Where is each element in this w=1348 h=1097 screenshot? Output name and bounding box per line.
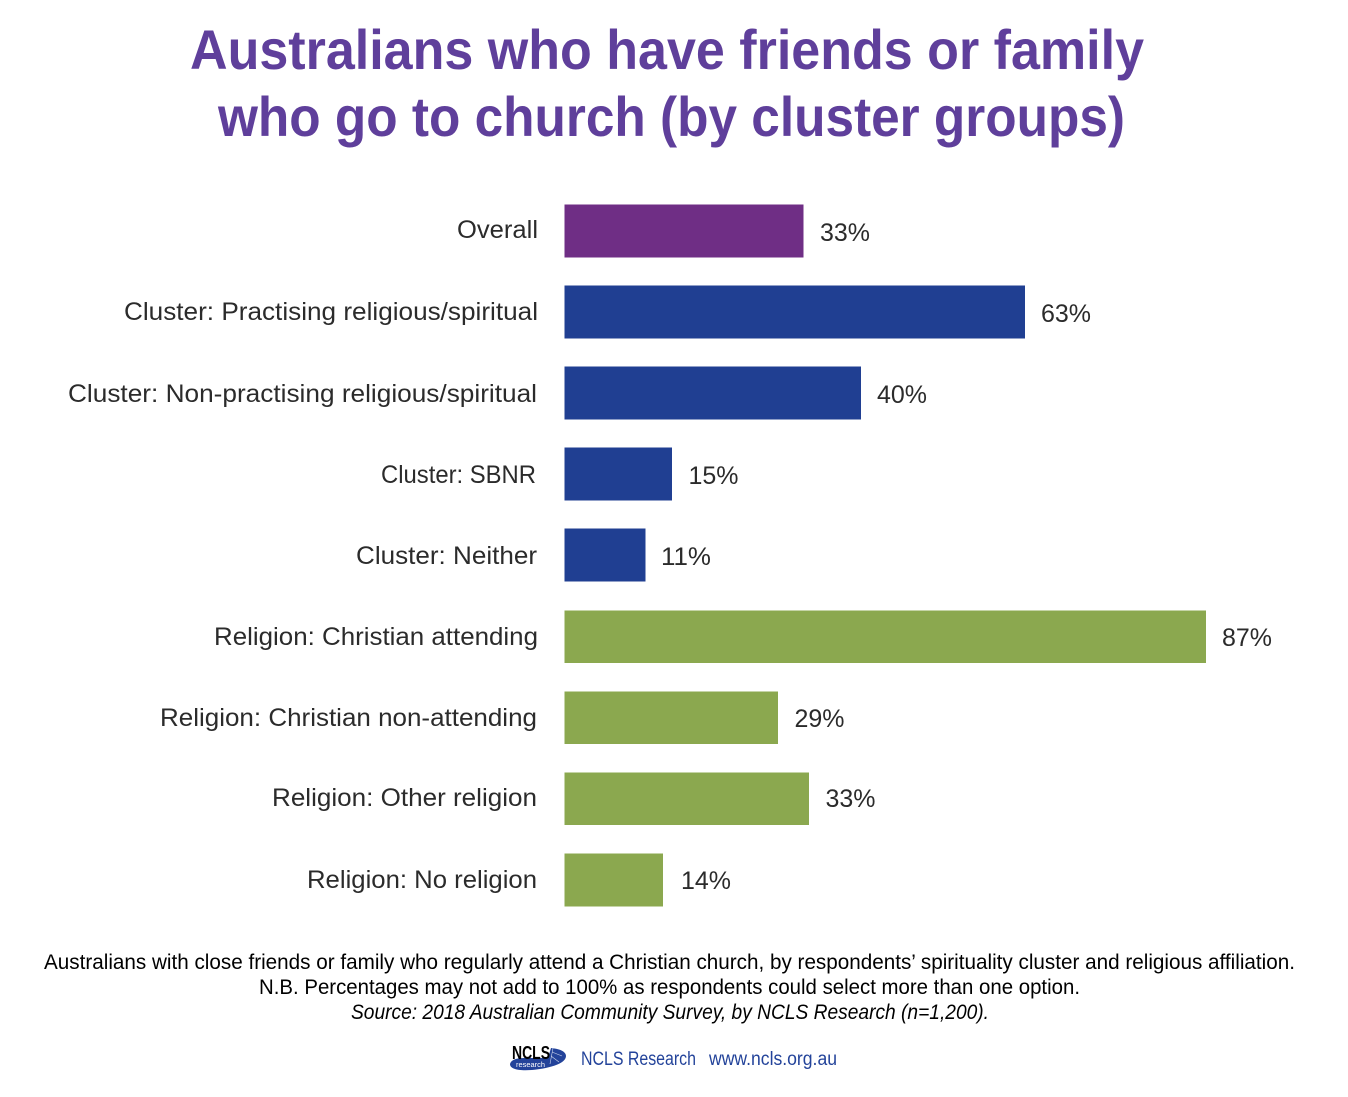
row: Religion Other: Religion: Other religion (272, 784, 537, 812)
row: Cluster Non-practising: 40% (877, 381, 927, 409)
row: Religion None: 14% (681, 867, 731, 895)
row: Cluster SBNR: Cluster: SBNR (381, 461, 536, 489)
row: Overall: 33% (820, 219, 870, 247)
bar chart (68, 204, 1272, 906)
caption: Australians with close friends or family who regularly attend a Christian church, by respondents’ spirituality cluster and religious affiliation. (44, 951, 1295, 974)
row: Cluster Neither: Cluster: Neither (356, 542, 537, 570)
row: Cluster Non-practising (68, 366, 927, 420)
row: Cluster Non-practising: Cluster: Non-practising religious/spiritual (68, 380, 537, 408)
row: Religion Christian non-attending: 29% (794, 705, 844, 733)
footer: organisation name: NCLS Research (581, 1049, 696, 1070)
row: Overall (457, 204, 870, 258)
row: Cluster Neither: 11% (661, 543, 711, 571)
row: Cluster Neither (356, 528, 711, 582)
title: who go to church (by cluster groups) (217, 85, 1125, 148)
row: Cluster SBNR (381, 448, 738, 500)
row: Overall: Overall (457, 216, 538, 244)
row: Cluster Practising: 63% (1041, 300, 1091, 328)
row: Religion Christian non-attending (160, 692, 844, 744)
row: Cluster Practising: Cluster: Practising religious/spiritual (124, 298, 538, 326)
row: Religion Christian attending (214, 610, 1272, 663)
caption: N.B. Percentages may not add to 100% as respondents could select more than one option. (259, 976, 1080, 999)
icon: NCLS logo (510, 1043, 566, 1070)
row: Cluster Practising (124, 286, 1091, 338)
row: Religion None (307, 854, 731, 906)
title: Australians who have friends or family (190, 18, 1144, 81)
title (190, 18, 1144, 148)
row: Religion Other: 33% (826, 785, 876, 813)
caption: Source: 2018 Australian Community Survey, by NCLS Research (n=1,200). (351, 1001, 989, 1024)
row: Cluster SBNR: 15% (688, 462, 738, 490)
row: Religion Christian attending: 87% (1222, 624, 1272, 652)
footer: website: www.ncls.org.au (708, 1049, 837, 1070)
icon: NCLS logo: research (516, 1062, 545, 1069)
row: Religion Christian non-attending: Religion: Christian non-attending (160, 704, 537, 732)
row: Religion Other (272, 772, 876, 825)
caption (44, 951, 1295, 1024)
row: Religion Christian attending: Religion: Christian attending (214, 623, 538, 651)
icon: NCLS logo: NCLS (512, 1043, 550, 1063)
row: Religion None: Religion: No religion (307, 866, 537, 894)
